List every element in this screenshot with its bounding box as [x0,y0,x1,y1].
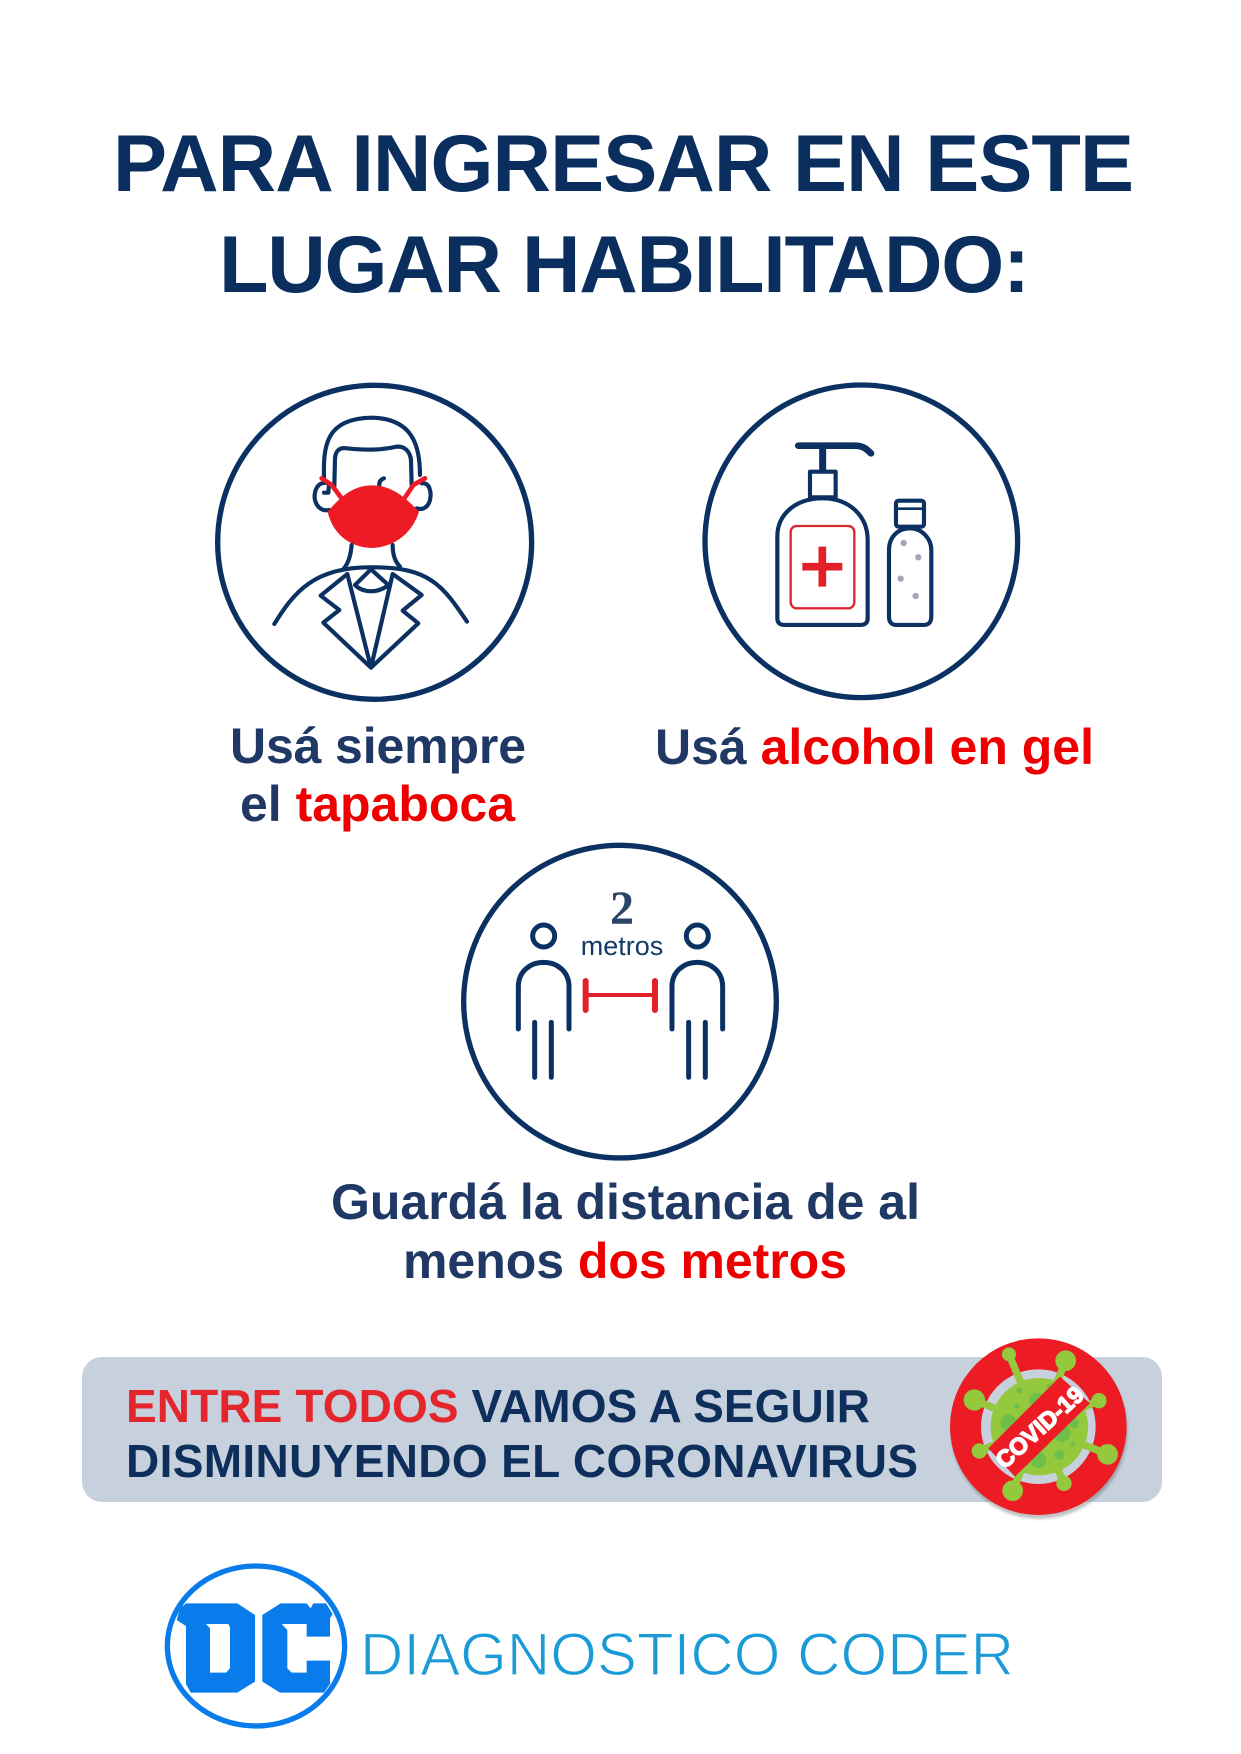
caption: tapaboca: Usá siempre [230,718,526,774]
icon: no covid-19 badge [950,1338,1128,1519]
title: LUGAR HABILITADO: [219,220,1030,310]
banner text: ENTRE TODOS VAMOS A SEGUIR [126,1380,870,1432]
icon: person wearing face mask [218,385,532,699]
title [113,119,1134,310]
caption: distancia: menos dos metros [403,1233,847,1289]
banner [82,1357,1162,1502]
caption: tapaboca [230,718,526,832]
label: 2 metros [581,882,663,961]
logo: DC emblem [167,1566,345,1726]
banner text [126,1380,918,1487]
caption: alcohol en gel: Usá alcohol en gel [655,719,1094,775]
icon: two metres distance [464,845,776,1158]
caption: distancia [331,1174,920,1289]
label: 2 metros: 2 [610,882,634,935]
label: 2 metros: metros [581,931,663,961]
caption: distancia: Guardá la distancia de al [331,1174,920,1230]
icon: no covid-19 badge: COVID-19 [991,1382,1090,1474]
caption: tapaboca: el tapaboca [240,776,516,832]
icon: sanitizer bottles [705,385,1018,698]
title: PARA INGRESAR EN ESTE [113,119,1134,209]
logo wordmark: DIAGNOSTICO CODER [360,1621,1014,1688]
banner text: DISMINUYENDO EL CORONAVIRUS [126,1435,918,1487]
